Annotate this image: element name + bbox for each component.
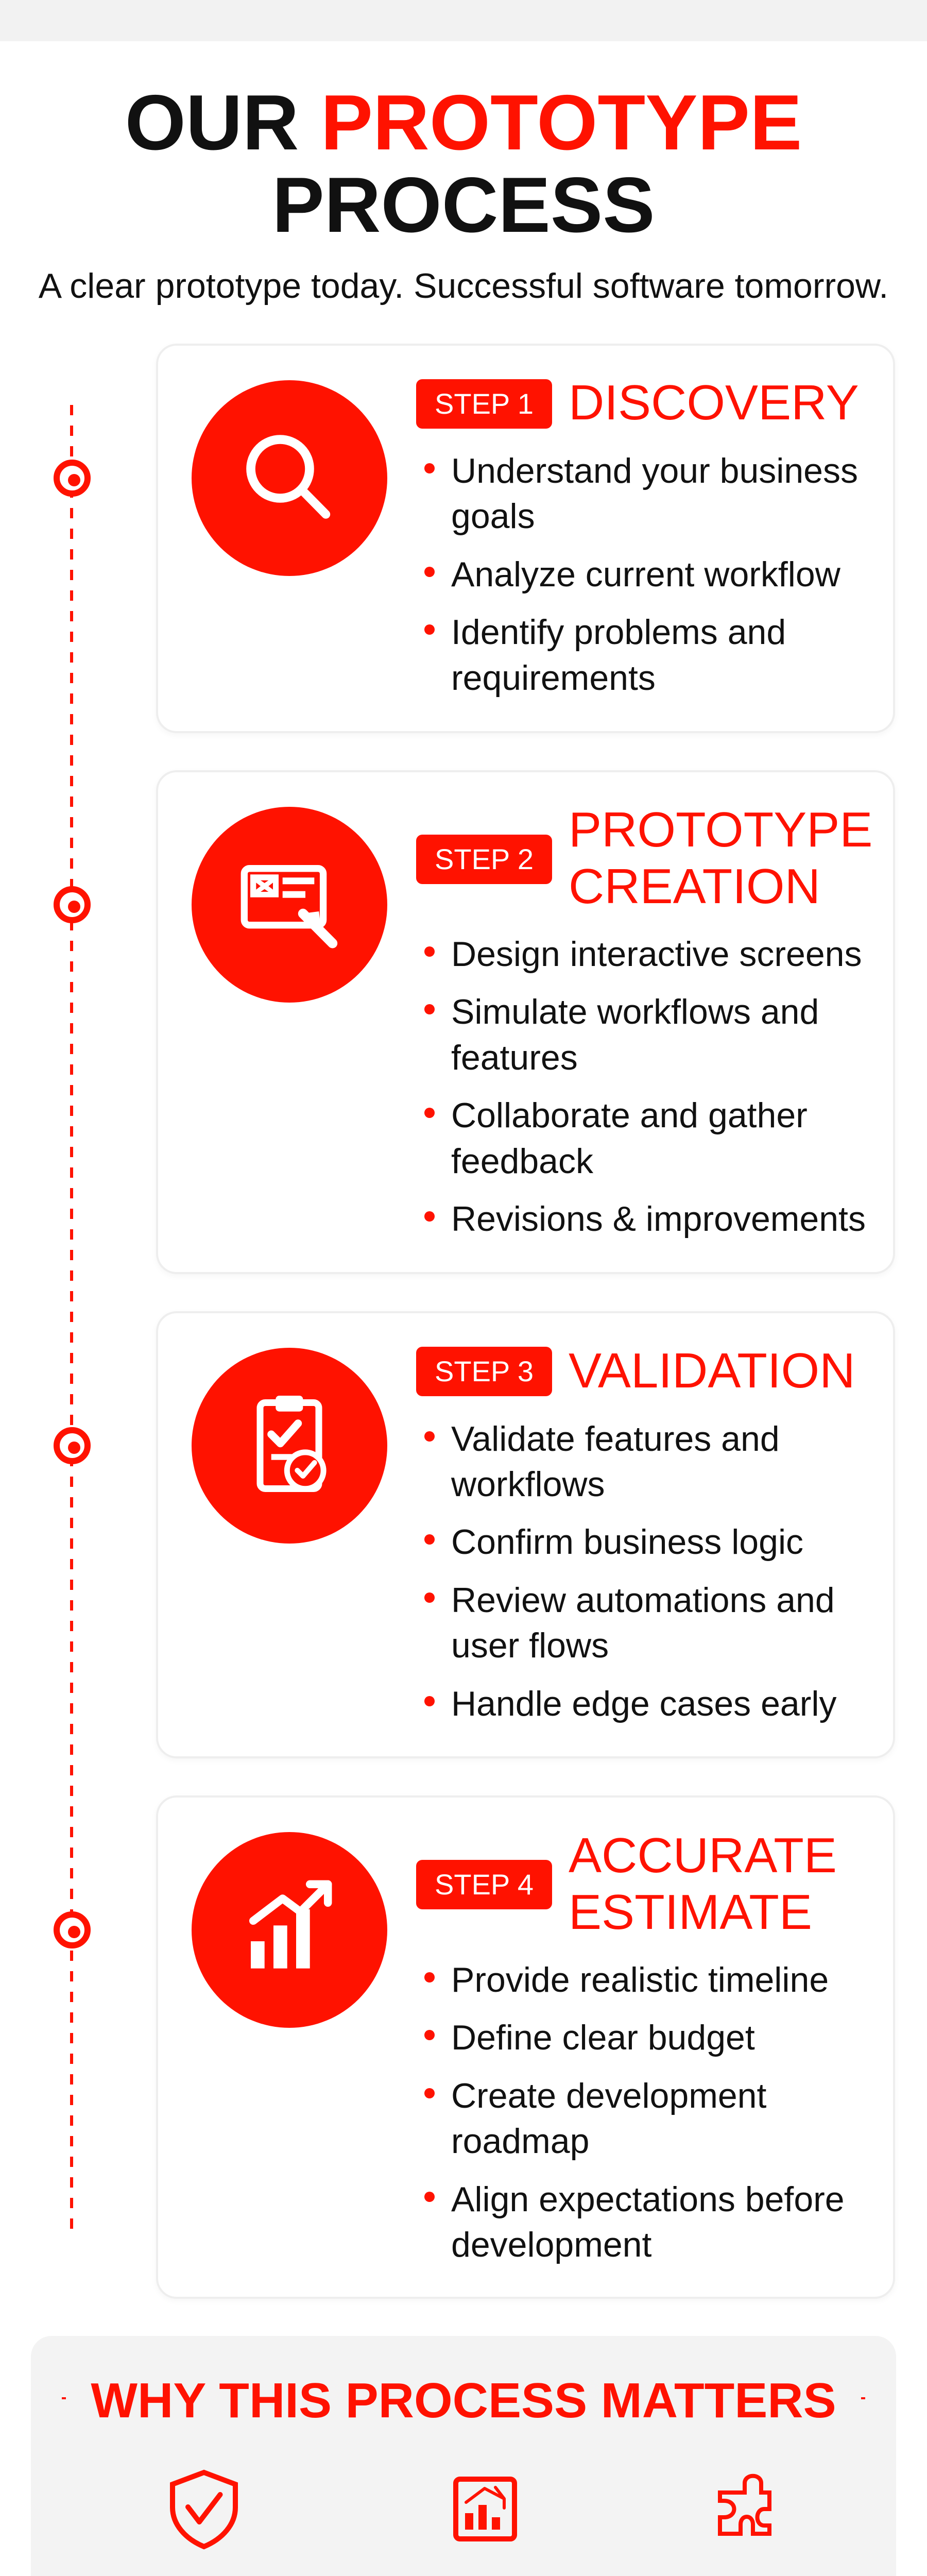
icon: clipboard with check — [192, 1348, 387, 1544]
step bullet list: Define clear budget — [451, 2018, 755, 2057]
title — [125, 79, 802, 249]
step bullet list: Design interactive screens — [451, 935, 862, 974]
step heading — [569, 802, 872, 914]
step bullet list: feedback — [451, 1142, 593, 1181]
panel: step 1 discovery — [156, 344, 895, 733]
step badge: STEP 1 — [435, 387, 534, 420]
step bullet list: Understand your business — [451, 451, 858, 490]
step bullet list — [424, 451, 858, 698]
step bullet list: Revisions & improvements — [451, 1199, 866, 1239]
icon: growth chart with arrow — [192, 1832, 387, 2028]
step bullet list — [424, 1960, 845, 2264]
step heading: VALIDATION — [569, 1343, 855, 1398]
benefit: ensures the right features — [662, 2474, 839, 2576]
step badge: STEP 3 — [435, 1355, 534, 1387]
step bullet list: roadmap — [451, 2122, 589, 2161]
section heading: WHY THIS PROCESS MATTERS — [91, 2373, 836, 2428]
step badge: STEP 2 — [435, 843, 534, 875]
step badge — [416, 1860, 552, 1909]
step bullet list: requirements — [451, 658, 656, 698]
step bullet list: Identify problems and — [451, 613, 786, 652]
step bullet list: Handle edge cases early — [451, 1684, 836, 1723]
step heading: PROTOTYPE — [569, 802, 872, 857]
icon: magnifying glass — [192, 380, 387, 576]
step badge — [416, 379, 552, 429]
icon: wireframe screen with cursor — [192, 807, 387, 1003]
panel: step 4 accurate estimate — [156, 1795, 895, 2299]
step bullet list: user flows — [451, 1626, 609, 1665]
step bullet list: Validate features and — [451, 1419, 780, 1458]
step bullet list: Review automations and — [451, 1581, 835, 1620]
step bullet list — [424, 935, 866, 1239]
step heading — [569, 1828, 837, 1940]
step heading: ACCURATE — [569, 1828, 837, 1883]
benefit: reduces development risks — [421, 2477, 550, 2576]
step bullet list: goals — [451, 497, 535, 536]
step bullet list: Collaborate and gather — [451, 1096, 808, 1135]
step bullet list: Provide realistic timeline — [451, 1960, 829, 1999]
icon: shield check — [170, 2470, 238, 2549]
panel: why this process matters — [31, 2336, 896, 2576]
step heading: ESTIMATE — [569, 1885, 812, 1940]
benefit: eliminates misunderstandings — [127, 2470, 281, 2576]
step bullet list: Confirm business logic — [451, 1522, 803, 1562]
step badge — [416, 835, 552, 884]
step bullet list: Align expectations before — [451, 2180, 845, 2219]
panel: step 2 prototype creation — [156, 770, 895, 1274]
icon: puzzle piece — [718, 2474, 771, 2536]
step bullet list: Analyze current workflow — [451, 555, 840, 594]
step bullet list: Create development — [451, 2076, 766, 2115]
step bullet list: Simulate workflows and — [451, 992, 819, 1031]
step bullet list: development — [451, 2225, 651, 2264]
title: PROCESS — [272, 161, 655, 249]
heading accent right — [861, 2397, 865, 2399]
step heading: DISCOVERY — [569, 375, 859, 430]
panel: step 3 validation — [156, 1311, 895, 1758]
timeline: dashed line with step markers — [54, 405, 91, 2229]
step bullet list: workflows — [451, 1465, 605, 1504]
step badge — [416, 1347, 552, 1396]
icon: report with house chart — [453, 2477, 517, 2541]
step bullet list — [424, 1419, 836, 1723]
subtitle: A clear prototype today. Successful software tomorrow. — [39, 266, 888, 306]
title: OUR PROTOTYPE — [125, 79, 802, 166]
step heading: CREATION — [569, 859, 820, 914]
step badge: STEP 4 — [435, 1868, 534, 1901]
heading accent left — [62, 2397, 66, 2399]
step bullet list: features — [451, 1038, 578, 1077]
